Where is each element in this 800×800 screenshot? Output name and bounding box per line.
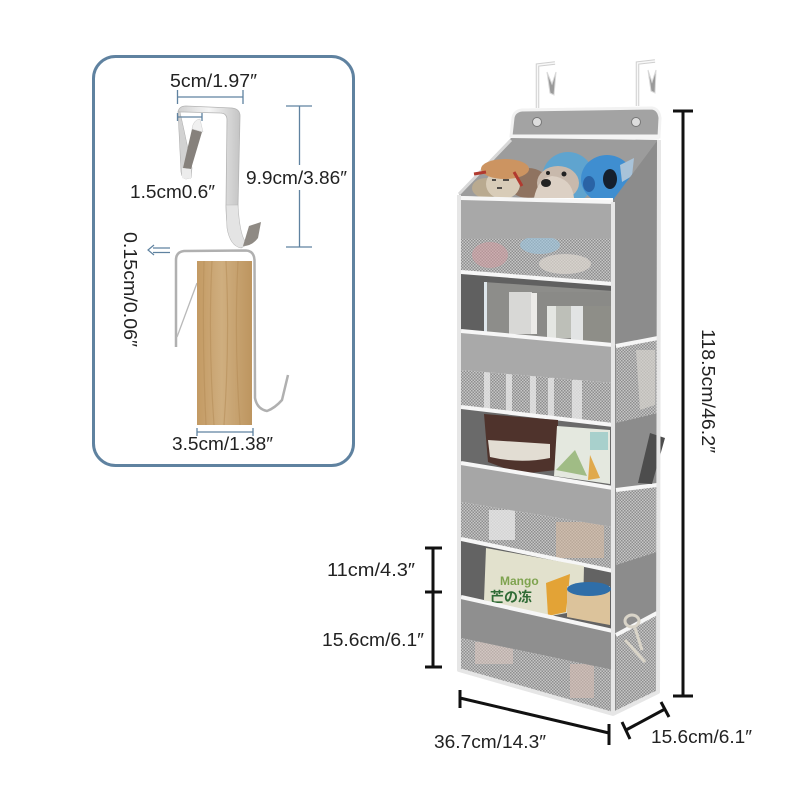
dimension: total height: 118.5cm/46.2″ <box>698 329 718 454</box>
dimension: compartment heights <box>322 548 442 667</box>
compartment with jar and snack bag <box>461 409 613 487</box>
dimension: depth <box>622 702 753 747</box>
icon: upper hook <box>178 106 261 248</box>
side panel <box>613 141 658 713</box>
pocket row 3 <box>461 463 613 571</box>
dimension: compartment heights: 11cm/4.3″ <box>327 560 416 580</box>
dimension: width <box>434 690 609 752</box>
organizer frame edges <box>459 140 659 714</box>
toy: doll <box>472 159 548 199</box>
dimension: total height <box>673 111 718 696</box>
back wall <box>458 138 658 200</box>
dimension: compartment heights: 15.6cm/6.1″ <box>322 630 425 650</box>
arrow: hook thickness <box>148 245 170 255</box>
compartment with mango snacks: 芒の冻 <box>490 589 532 605</box>
toy: monkey <box>534 152 594 204</box>
dimension: door thickness: 3.5cm/1.38″ <box>172 434 274 454</box>
pocket row 1 <box>460 198 613 288</box>
dimension: depth: 15.6cm/6.1″ <box>651 727 753 747</box>
icon: lower hook over door <box>176 250 288 411</box>
toy: blue alien <box>581 155 634 203</box>
compartment with mango snacks: Mango <box>500 574 539 588</box>
left slanted edge <box>459 140 511 194</box>
compartment with mango snacks <box>461 541 613 630</box>
item: comb <box>638 433 665 484</box>
dimension: hook height: 9.9cm/3.86″ <box>246 168 348 188</box>
panel: hook details <box>94 56 354 466</box>
dimension: clip width <box>130 113 216 202</box>
pocket row 2 <box>461 331 613 425</box>
dimension: clip width: 1.5cm0.6″ <box>130 182 216 202</box>
toys in top pocket <box>472 152 634 204</box>
compartment with books <box>461 274 613 346</box>
icon: door hooks <box>538 61 656 108</box>
top header flap <box>511 108 660 137</box>
dimension: hook width <box>170 71 258 104</box>
label: hook thickness: 0.15cm/0.06″ <box>120 232 140 348</box>
side mesh pockets <box>616 338 665 712</box>
item: scissors <box>625 615 645 662</box>
organizer product <box>458 61 665 714</box>
door wood block <box>197 261 252 425</box>
dimension: hook height <box>246 106 348 247</box>
dimension: width: 36.7cm/14.3″ <box>434 732 547 752</box>
dimension: hook width: 5cm/1.97″ <box>170 71 258 91</box>
pocket row 4 <box>461 597 613 714</box>
